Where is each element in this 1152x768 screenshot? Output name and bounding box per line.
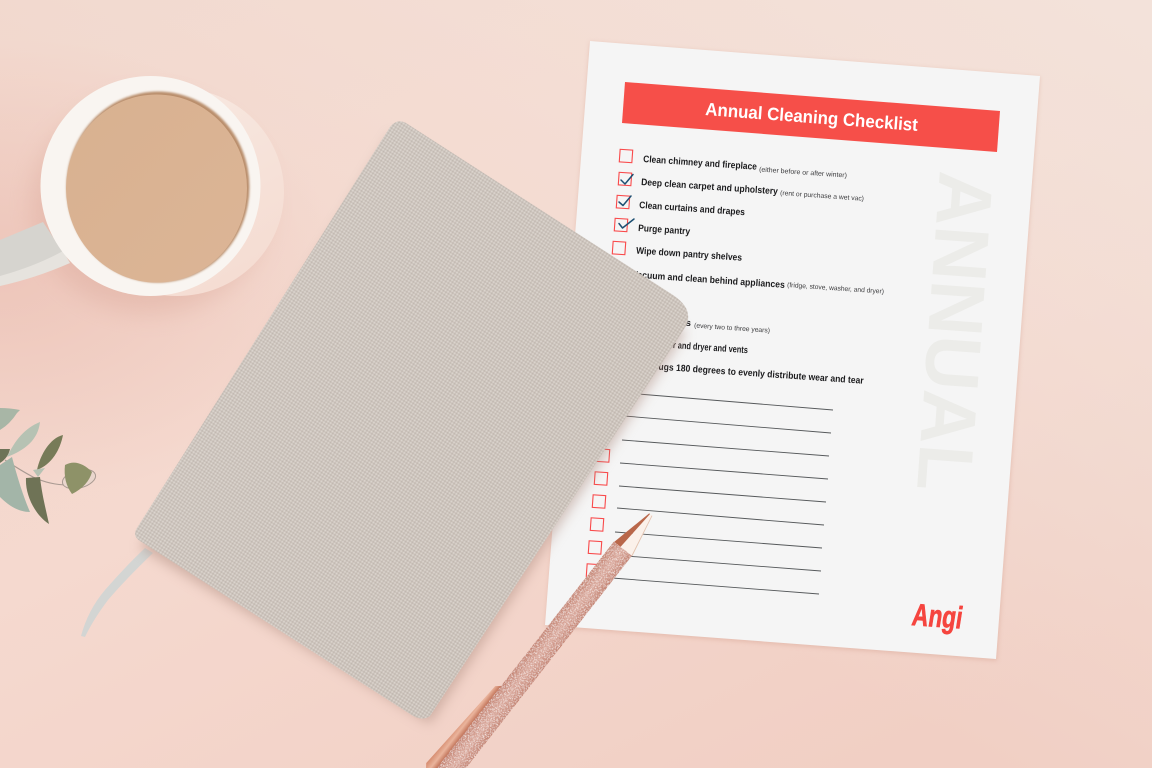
mug body beyond the rim — [70, 88, 284, 296]
check marks — [619, 174, 634, 228]
leaf: pale small — [33, 468, 45, 477]
mug handle — [0, 222, 70, 286]
pen tip: highlight side — [621, 512, 659, 556]
pen tip: shadow edge — [625, 515, 659, 556]
checklist items: (rent or purchase a wet vac) — [780, 190, 864, 203]
pen clip — [422, 678, 503, 768]
checklist items: Rotate rugs 180 degrees to evenly distribute wear and tear — [626, 360, 864, 387]
checklist items — [626, 154, 884, 387]
leaf: pale upper — [7, 422, 40, 457]
checkboxes — [586, 149, 633, 577]
checklist items: Clean gutters — [630, 314, 691, 329]
checklist items: Vacuum and clean behind appliances — [632, 270, 785, 291]
leaf: round — [65, 463, 92, 494]
checklist items: Clean curtains and drapes — [639, 200, 745, 218]
checklist items: Wipe down pantry shelves — [636, 246, 742, 264]
blank writing lines — [612, 393, 833, 594]
checklist items: Clean chimney and fireplace — [643, 154, 757, 173]
leaf: olive upper — [37, 435, 63, 470]
leaf: pale large — [0, 457, 30, 512]
notebook — [135, 121, 688, 724]
checklist items: Deep clean carpet and upholstery — [641, 177, 779, 197]
Angi logo: Angi — [910, 597, 965, 635]
mug rim — [40, 76, 260, 296]
panel: checklist paper — [545, 41, 1040, 661]
title banner: Annual Cleaning Checklist — [705, 99, 919, 135]
cover weave — [135, 121, 688, 719]
eucalyptus sprig — [0, 408, 98, 524]
leaf: round ring — [60, 466, 98, 492]
checklist items: (every two to three years) — [694, 323, 770, 335]
stem — [5, 460, 68, 485]
checklist items: (either before or after winter) — [759, 167, 847, 179]
watermark: ANNUAL: ANNUAL — [900, 169, 1009, 494]
checklist items: Clean washer and dryer and vents — [628, 337, 748, 356]
checklist items: (fridge, stove, washer, and dryer) — [787, 282, 884, 296]
coffee — [66, 92, 250, 282]
pen tip: copper side — [614, 507, 650, 549]
leaf: top — [0, 408, 20, 430]
title banner — [622, 82, 1000, 152]
leaf: olive lower — [26, 477, 49, 524]
pen — [410, 500, 659, 768]
pen barrel — [419, 542, 632, 768]
ribbon bookmark — [81, 548, 153, 637]
checklist items: Purge pantry — [638, 223, 691, 238]
leaf: dark small — [0, 449, 10, 463]
notebook cover — [135, 121, 688, 719]
coffee mug — [0, 76, 284, 313]
